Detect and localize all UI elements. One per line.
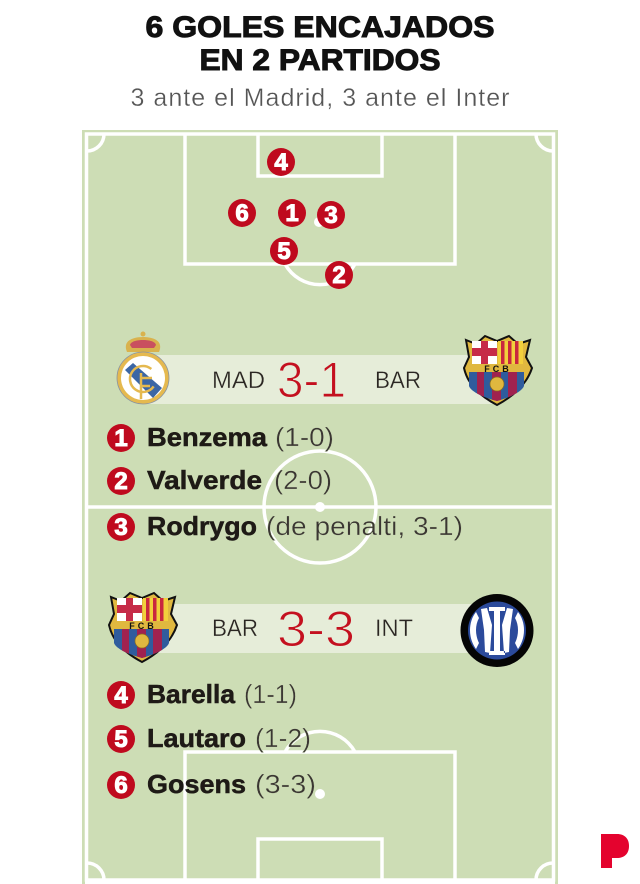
goal markers on pitch: 2	[332, 262, 346, 289]
logo: P	[601, 834, 629, 868]
scoreboard: Barcelona 3-3 Inter: 3-3	[277, 601, 355, 657]
goal list: second match: Barella	[147, 679, 236, 709]
goal list: first match: 1	[114, 425, 128, 452]
badge: Barcelona	[109, 593, 177, 662]
badge: Barcelona: FCB	[484, 364, 512, 374]
goal list: second match: Gosens	[147, 769, 246, 799]
goal list: first match: Rodrygo	[147, 511, 257, 541]
goal list: first match: 3	[114, 514, 128, 541]
badge: Real Madrid	[117, 332, 169, 404]
goal list: first match: Benzema	[147, 422, 268, 452]
goal list: second match: (1-2)	[255, 723, 311, 753]
goal markers on pitch: 4	[274, 149, 288, 176]
title	[146, 11, 494, 77]
goal list: second match: 6	[114, 772, 128, 799]
goal markers on pitch: 5	[277, 238, 291, 265]
goal list: second match: 4	[114, 682, 128, 709]
badge: Barcelona	[464, 336, 532, 405]
subtitle: 3 ante el Madrid, 3 ante el Inter	[130, 84, 510, 112]
football pitch	[82, 130, 558, 884]
scoreboard: Madrid 3-1 Barcelona	[145, 352, 495, 408]
goal list: first match: (1-0)	[275, 422, 334, 452]
scoreboard: Barcelona 3-3 Inter: BAR	[212, 615, 258, 642]
goal list: second match	[107, 679, 316, 799]
goal list: second match: (3-3)	[255, 769, 316, 799]
badge: Barcelona: FCB	[129, 621, 157, 631]
scoreboard: Madrid 3-1 Barcelona: 3-1	[277, 352, 346, 408]
goal list: second match: (1-1)	[244, 679, 297, 709]
goal markers on pitch: 1	[285, 200, 299, 227]
goal markers on pitch: 3	[324, 202, 338, 229]
goal list: first match: (2-0)	[274, 465, 332, 495]
title: 6 GOLES ENCAJADOS	[146, 11, 494, 44]
goal list: first match: Valverde	[147, 465, 262, 495]
goal markers on pitch: 6	[235, 200, 249, 227]
badge: Inter	[460, 594, 534, 667]
goal list: second match: Lautaro	[147, 723, 246, 753]
scoreboard: Barcelona 3-3 Inter	[145, 601, 495, 657]
goal list: first match: 2	[114, 468, 128, 495]
scoreboard: Madrid 3-1 Barcelona: MAD	[212, 367, 265, 394]
title: EN 2 PARTIDOS	[200, 44, 440, 77]
goal list: first match	[107, 422, 463, 541]
goal list: second match: 5	[114, 726, 128, 753]
scoreboard: Madrid 3-1 Barcelona: BAR	[375, 367, 421, 394]
goal markers on pitch	[228, 148, 353, 289]
goal list: first match: (de penalti, 3-1)	[266, 511, 463, 541]
scoreboard: Barcelona 3-3 Inter: INT	[375, 615, 413, 642]
